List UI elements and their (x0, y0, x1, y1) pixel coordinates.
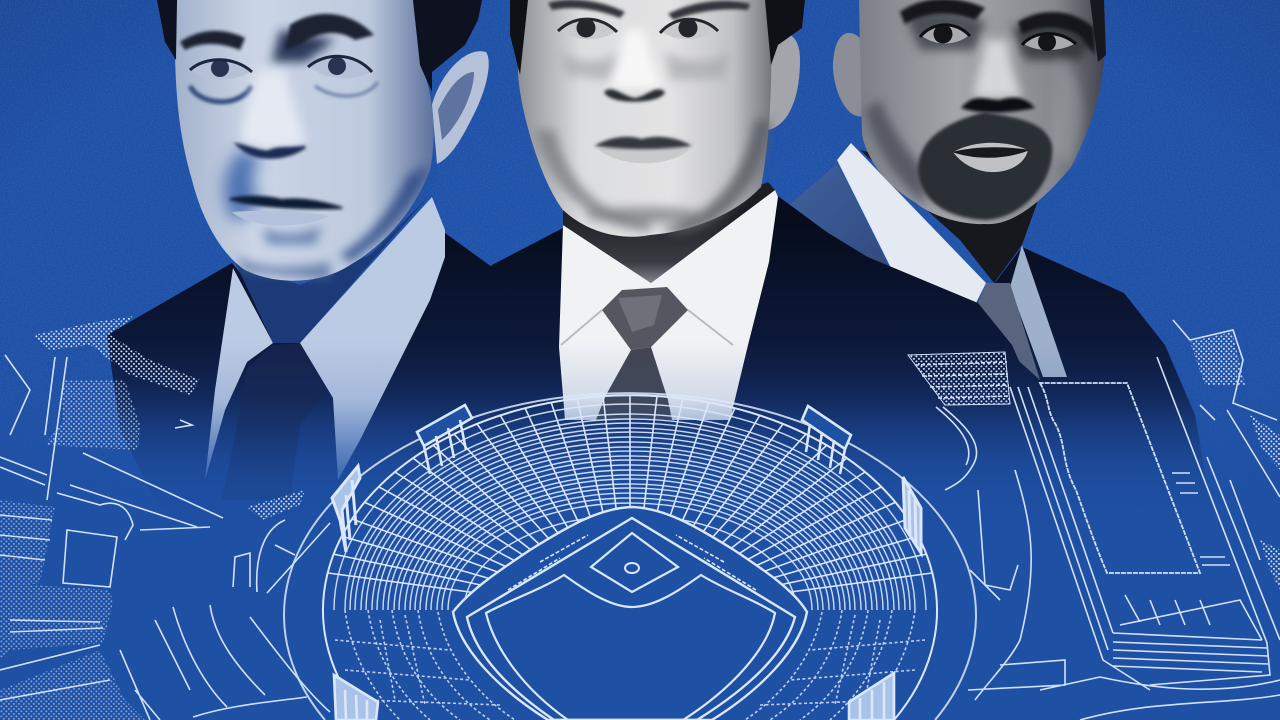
center man suit (355, 196, 1045, 540)
field inner border (486, 575, 775, 720)
blueprint: right parking structure (908, 320, 1280, 720)
right man hair edge (1090, 0, 1106, 62)
pitcher mound (625, 563, 639, 573)
right man nostril shadow (961, 98, 1035, 113)
right man suit (786, 163, 1215, 530)
structure outer right edge (1150, 357, 1270, 685)
tower left (332, 466, 360, 552)
side road curves (936, 407, 1280, 720)
structure parallel edges (1010, 387, 1150, 690)
right man shirt collar (837, 143, 1067, 377)
left stadium annex (233, 520, 330, 593)
tower top left (417, 405, 472, 474)
tower right (903, 477, 921, 553)
left man face shadows (224, 30, 430, 280)
right man brows (900, 0, 1095, 55)
left man neck (235, 195, 430, 343)
foul line detail (508, 535, 756, 590)
vertical poles (5, 355, 192, 500)
window frame (63, 530, 117, 587)
upper right sketch (1173, 320, 1280, 640)
right man ear (833, 33, 864, 117)
tower bottom left (334, 675, 378, 720)
center man hair (510, 0, 805, 75)
center man eyes (558, 18, 718, 39)
left man shirt collar (205, 197, 445, 480)
stippled lower bands (0, 500, 145, 720)
center man nostril shadow (604, 89, 665, 102)
structure tiers (1113, 595, 1268, 672)
lower seating right (745, 610, 925, 720)
right man goatee (918, 112, 1052, 220)
center man face shading (535, 30, 770, 235)
upper right stipple (1190, 332, 1280, 590)
tower top right (802, 406, 851, 474)
field outer border (467, 518, 795, 720)
left man head (175, 0, 434, 281)
center man shirt collar (559, 190, 778, 420)
figure: center man (355, 0, 1045, 540)
right man neck (860, 150, 1040, 283)
left man suit (107, 233, 560, 530)
stippled roof band (33, 316, 200, 395)
left man ear (432, 51, 489, 164)
lower fan lines (120, 605, 330, 720)
outer perimeter rings (284, 393, 976, 720)
right man head (859, 0, 1104, 224)
right man face shading (865, 9, 1095, 205)
left man mouth (230, 197, 342, 225)
building horizontal lines (0, 515, 110, 700)
structure roof (1040, 383, 1200, 573)
left man brows (180, 14, 374, 50)
right man eyes (920, 24, 1076, 51)
center man mouth (594, 137, 692, 163)
right man tie (975, 283, 1040, 380)
right man lapel highlight (786, 163, 892, 272)
upper seating arcs (334, 404, 926, 610)
center man head (518, 0, 771, 237)
bowl inner edge (453, 507, 807, 720)
center man collar fold lines (561, 310, 733, 345)
infield diamond (591, 533, 678, 592)
left man nose (238, 70, 305, 157)
stippled building block (45, 380, 140, 450)
blueprint: left buildings (0, 316, 330, 720)
center man ear (768, 34, 800, 130)
stippled block (908, 352, 1010, 405)
structure side stairs (1172, 473, 1230, 565)
right man mouth (952, 143, 1030, 172)
figure: left man (107, 0, 560, 530)
center man tie (596, 287, 688, 420)
center man neck (563, 182, 775, 283)
figure: right man (786, 0, 1215, 530)
diagonal roof lines (0, 453, 223, 540)
blue fade over lower bodies (0, 340, 1280, 720)
blueprint: stadium (284, 393, 976, 720)
annex stipple (247, 490, 305, 520)
stippled block horizontal lines (915, 362, 1010, 398)
left man tie (222, 343, 327, 500)
radial aisles (328, 395, 932, 595)
left man hair (157, 0, 482, 92)
center man brows (548, 0, 750, 20)
tower bottom right (849, 673, 894, 720)
lower seating left (335, 610, 515, 720)
left man eyes (190, 56, 378, 102)
